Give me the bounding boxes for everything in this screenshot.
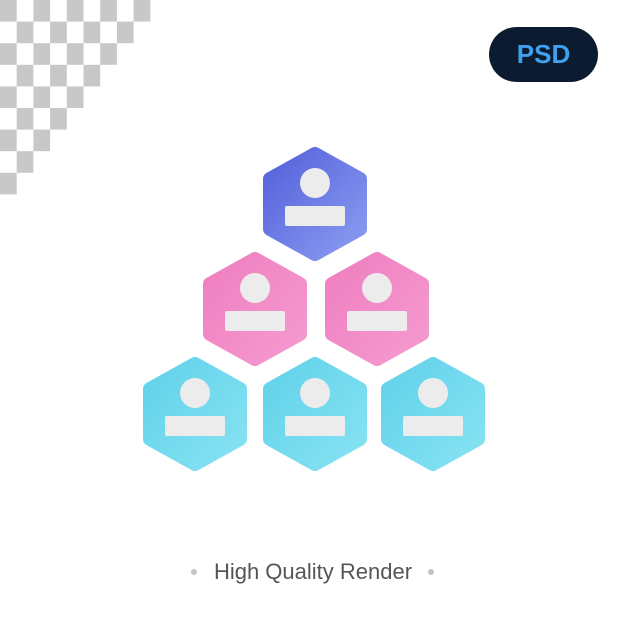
badge: PSD [489,27,598,82]
dot right [428,569,434,575]
hexagon: bottom left cyan [150,364,240,464]
hexagon: bottom right cyan [388,364,478,464]
caption text: High Quality Render [214,559,412,584]
badge: PSD: PSD [517,39,570,69]
dot left [191,569,197,575]
hexagon: middle right pink [332,259,422,359]
checkerboard transparency pattern [0,0,150,194]
hexagon: top blue [270,154,360,254]
caption: High Quality Render [191,559,434,584]
hexagon: middle left pink [210,259,300,359]
hexagon: bottom middle cyan [270,364,360,464]
